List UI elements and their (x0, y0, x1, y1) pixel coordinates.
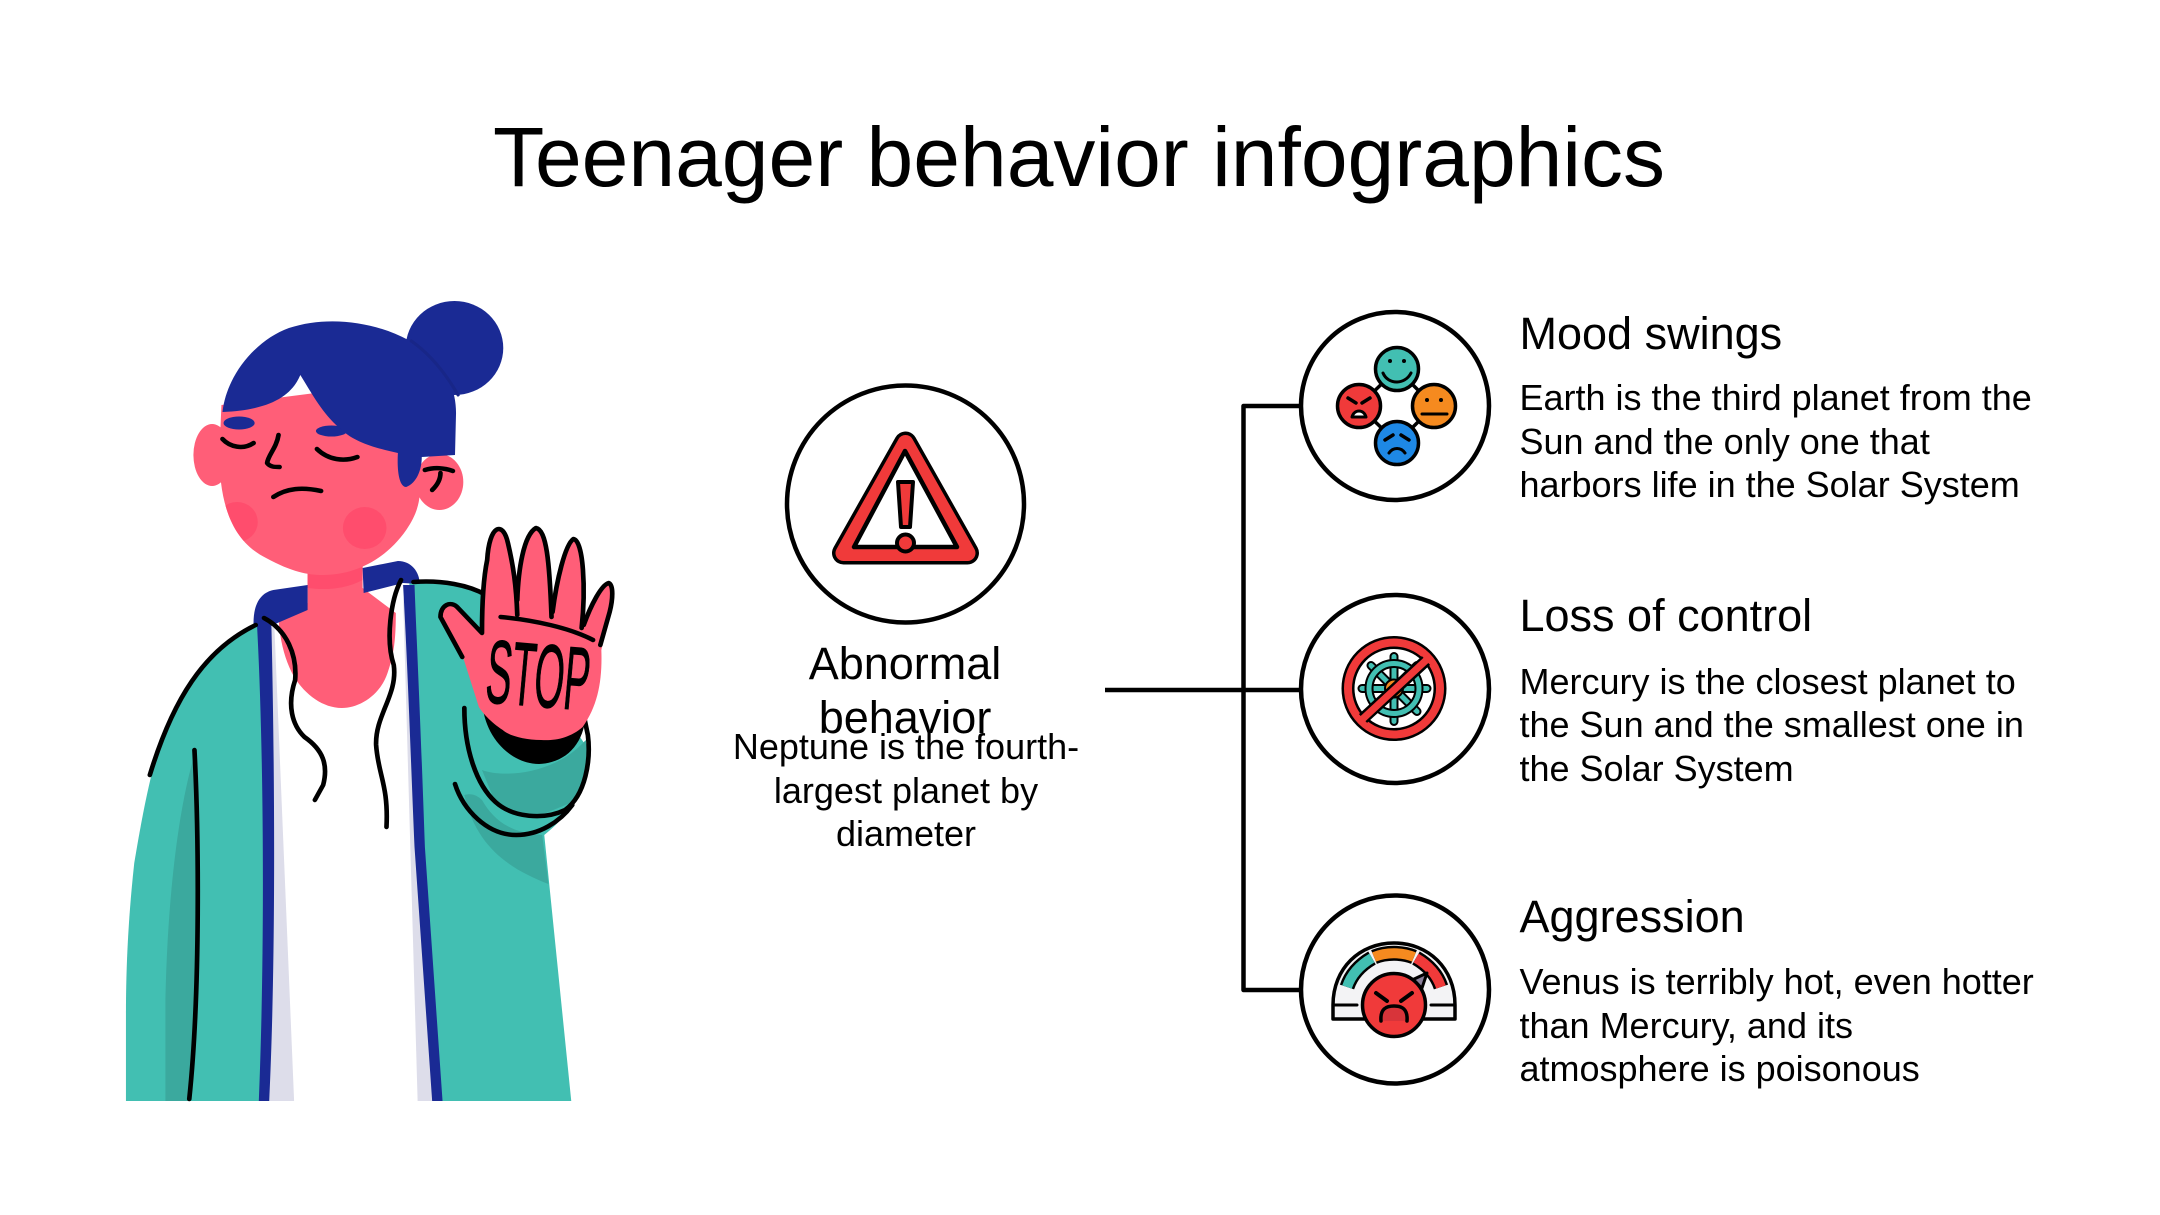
shirt lavender strips (269, 597, 433, 1101)
prohibition sign (1348, 642, 1440, 734)
sleeve shadows (464, 740, 589, 884)
illustration: teenager making stop gesture (126, 301, 612, 1101)
heading: aggression: Aggression (1520, 891, 1745, 942)
text: mood swings description (1520, 377, 2032, 505)
neutral face (1412, 384, 1456, 428)
hair (222, 321, 456, 487)
text: mood swings description: harbors life in the Solar System (1520, 464, 2020, 505)
happy face (1376, 348, 1418, 390)
heading: abnormal behavior: behavior (819, 692, 991, 743)
jacket zipper bands (257, 585, 443, 1101)
text: mood swings description: Earth is the third planet from the (1520, 377, 2032, 418)
neck shadow (308, 565, 363, 589)
text: mood swings description: Sun and the only one that (1520, 420, 1930, 462)
eyebrows (224, 416, 347, 436)
text: aggression description: than Mercury, and its (1520, 1004, 1853, 1046)
text: abnormal behavior description (733, 726, 1079, 854)
diamond link (1359, 369, 1434, 443)
face (219, 390, 422, 575)
angry face (1338, 384, 1380, 428)
jacket left fold shadow (165, 755, 199, 1101)
text: loss of control description (1520, 660, 2024, 788)
text: loss of control description: Mercury is the closest planet to (1520, 660, 2016, 702)
heading: mood swings: Mood swings (1520, 308, 1782, 358)
text: aggression description: atmosphere is poisonous (1520, 1048, 1920, 1089)
text: aggression description: Venus is terribly hot, even hotter (1520, 961, 2034, 1002)
warning triangle (844, 443, 968, 553)
jacket left panel (126, 625, 274, 1101)
heading: abnormal behavior: Abnormal (809, 638, 1001, 689)
hair bun shade (411, 341, 458, 395)
jacket outline and folds (150, 582, 486, 1099)
sad face (1376, 422, 1418, 464)
needle (1412, 973, 1427, 988)
cheek blush (216, 502, 386, 549)
text: aggression description (1520, 961, 2034, 1089)
ears (193, 424, 463, 510)
icon circle: aggression (1301, 896, 1489, 1084)
title: Teenager behavior infographics (493, 110, 1665, 204)
connector lines (1105, 406, 1300, 990)
heading: loss of control: Loss of control (1520, 590, 1812, 641)
icon circle: loss of control (1301, 595, 1489, 783)
text: loss of control description: the Sun and the smallest one in (1520, 704, 2024, 745)
drawstrings (264, 580, 401, 827)
hand (440, 528, 612, 740)
angry face (1362, 974, 1426, 1036)
icon circle: mood swings (1301, 312, 1489, 500)
hand outline (440, 528, 612, 657)
STOP text on palm: STOP (482, 620, 595, 730)
hair bun (406, 301, 503, 395)
icon circle: abnormal behavior warning (787, 386, 1024, 622)
facial lines (222, 435, 453, 497)
neck and chest (279, 565, 396, 708)
ship wheel (1362, 656, 1427, 722)
cuff (482, 700, 586, 764)
text: abnormal behavior description: largest planet by (774, 770, 1038, 810)
heading: abnormal behavior (808, 638, 1001, 743)
jacket collar (254, 561, 420, 627)
sleeve outlines (455, 708, 589, 835)
text: abnormal behavior description: Neptune is the fourth- (733, 726, 1079, 767)
text: loss of control description: the Solar System (1520, 748, 1794, 788)
gauge dial (1333, 943, 1455, 1019)
text: abnormal behavior description: diameter (836, 813, 976, 854)
jacket right panel (409, 582, 589, 1101)
